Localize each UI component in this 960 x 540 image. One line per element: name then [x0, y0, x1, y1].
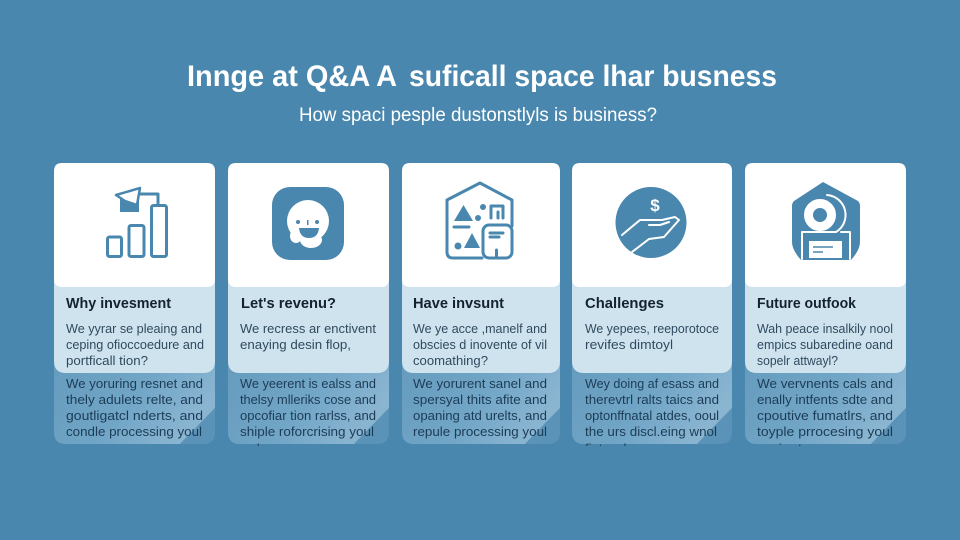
answer text: spersyal thits afite and — [413, 392, 547, 407]
answer text: We yorurent sanel and — [413, 376, 547, 391]
answer text — [757, 378, 892, 446]
answer text: therevtrl ralts taics and — [585, 392, 719, 407]
answer text: thely adulets relte, and — [66, 392, 203, 407]
answer text: survey — [413, 441, 459, 456]
answer text: toyple prrocesing youl — [757, 424, 893, 439]
icon: hand holding coin: $ — [650, 196, 660, 215]
question text: ceping ofioccoedure and — [66, 337, 204, 352]
question text: revifes dimtoyl — [585, 337, 673, 352]
heading: Why invesment — [66, 296, 171, 312]
heading: Have invsunt — [413, 296, 504, 312]
lower panel corner — [871, 408, 906, 444]
lower panel — [745, 360, 906, 444]
answer text: We vervnents cals and — [757, 376, 893, 391]
answer text: optonffnatal atdes, ooul — [585, 408, 719, 423]
question text: portficall tion? — [66, 353, 148, 368]
icon: smiling face — [272, 187, 344, 260]
question text: enaying desin flop, — [240, 337, 351, 352]
answer text: and may — [240, 441, 285, 456]
lower panel — [572, 360, 732, 444]
panel: have investment — [402, 163, 560, 456]
heading: Future outfook — [757, 296, 857, 312]
white panel — [402, 163, 560, 287]
white panel — [745, 163, 906, 287]
answer text: fintwork — [585, 441, 630, 456]
icon: house with shapes and document — [447, 183, 512, 258]
title: suficall space lhar busness — [409, 60, 777, 93]
lower panel corner — [180, 408, 215, 444]
answer text: goutligatcl nderts, and — [66, 408, 203, 423]
lower panel — [54, 360, 215, 444]
subtitle: How spaci pesple dustonstlyls is business? — [299, 105, 657, 126]
answer text: We yoruring resnet and — [66, 376, 203, 391]
question text: sopelr attwayl? — [757, 353, 838, 368]
question text: We yyrar se pleaing and — [66, 321, 202, 336]
question text: We yepees, reeporotoce — [585, 321, 719, 336]
icon: hand holding coin — [616, 187, 686, 258]
panel: revenue — [228, 163, 389, 456]
answer text: condle processing youl — [66, 424, 202, 439]
heading: Let's revenu? — [241, 296, 336, 312]
answer text: repule processing youl — [413, 424, 547, 439]
lower panel corner — [525, 408, 560, 444]
icon: hexagon with ring and document — [792, 182, 860, 260]
question text: coomathing? — [413, 353, 488, 368]
question text: empics subaredine oand — [757, 337, 893, 352]
middle panel — [745, 280, 906, 373]
question text — [413, 321, 547, 368]
panel: why investment — [54, 163, 215, 456]
answer text: We yeerent is ealss and — [240, 376, 376, 391]
answer text: a survey — [66, 441, 111, 456]
title: Innge at Q&A A — [187, 60, 397, 93]
question text: We ye acce ,manelf and — [413, 321, 547, 336]
panel: future outlook — [745, 163, 906, 456]
answer text: enally intfents sdte and — [757, 392, 893, 407]
answer text: shiple roforcrising youl — [240, 424, 374, 439]
answer text: the urs discl.eing wnol — [585, 424, 717, 439]
question text — [585, 321, 719, 352]
title — [187, 60, 777, 93]
question text: obscies d inovente of vil — [413, 337, 547, 352]
question text: Wah peace insalkily nool — [757, 321, 893, 336]
middle panel — [402, 280, 560, 373]
question text: We recress ar enctivent — [240, 321, 376, 336]
question text — [240, 321, 376, 352]
answer text: thelsy mlleriks cose and — [240, 392, 376, 407]
answer text: Wey doing af esass and — [585, 376, 719, 391]
white panel — [54, 163, 215, 287]
lower panel corner — [354, 408, 389, 444]
answer text — [66, 378, 202, 438]
middle panel — [54, 280, 215, 373]
answer text: cpoutive fumatlrs, and — [757, 408, 893, 423]
answer text — [413, 378, 546, 438]
answer text: opaning atd urelts, and — [413, 408, 547, 423]
answer text — [240, 378, 376, 446]
answer text: opcofiar tion rarlss, and — [240, 408, 376, 423]
icon: bar chart with flag — [108, 188, 166, 256]
answer text: project — [757, 441, 802, 456]
middle panel — [572, 280, 732, 373]
middle panel — [228, 280, 389, 373]
panel: challenges — [572, 163, 732, 456]
white panel — [572, 163, 732, 287]
question text — [66, 321, 204, 368]
question text — [757, 321, 893, 368]
white panel — [228, 163, 389, 287]
lower panel — [402, 360, 560, 444]
lower panel corner — [697, 408, 732, 444]
lower panel — [228, 360, 389, 444]
heading: Challenges — [585, 296, 664, 312]
answer text — [585, 378, 718, 446]
